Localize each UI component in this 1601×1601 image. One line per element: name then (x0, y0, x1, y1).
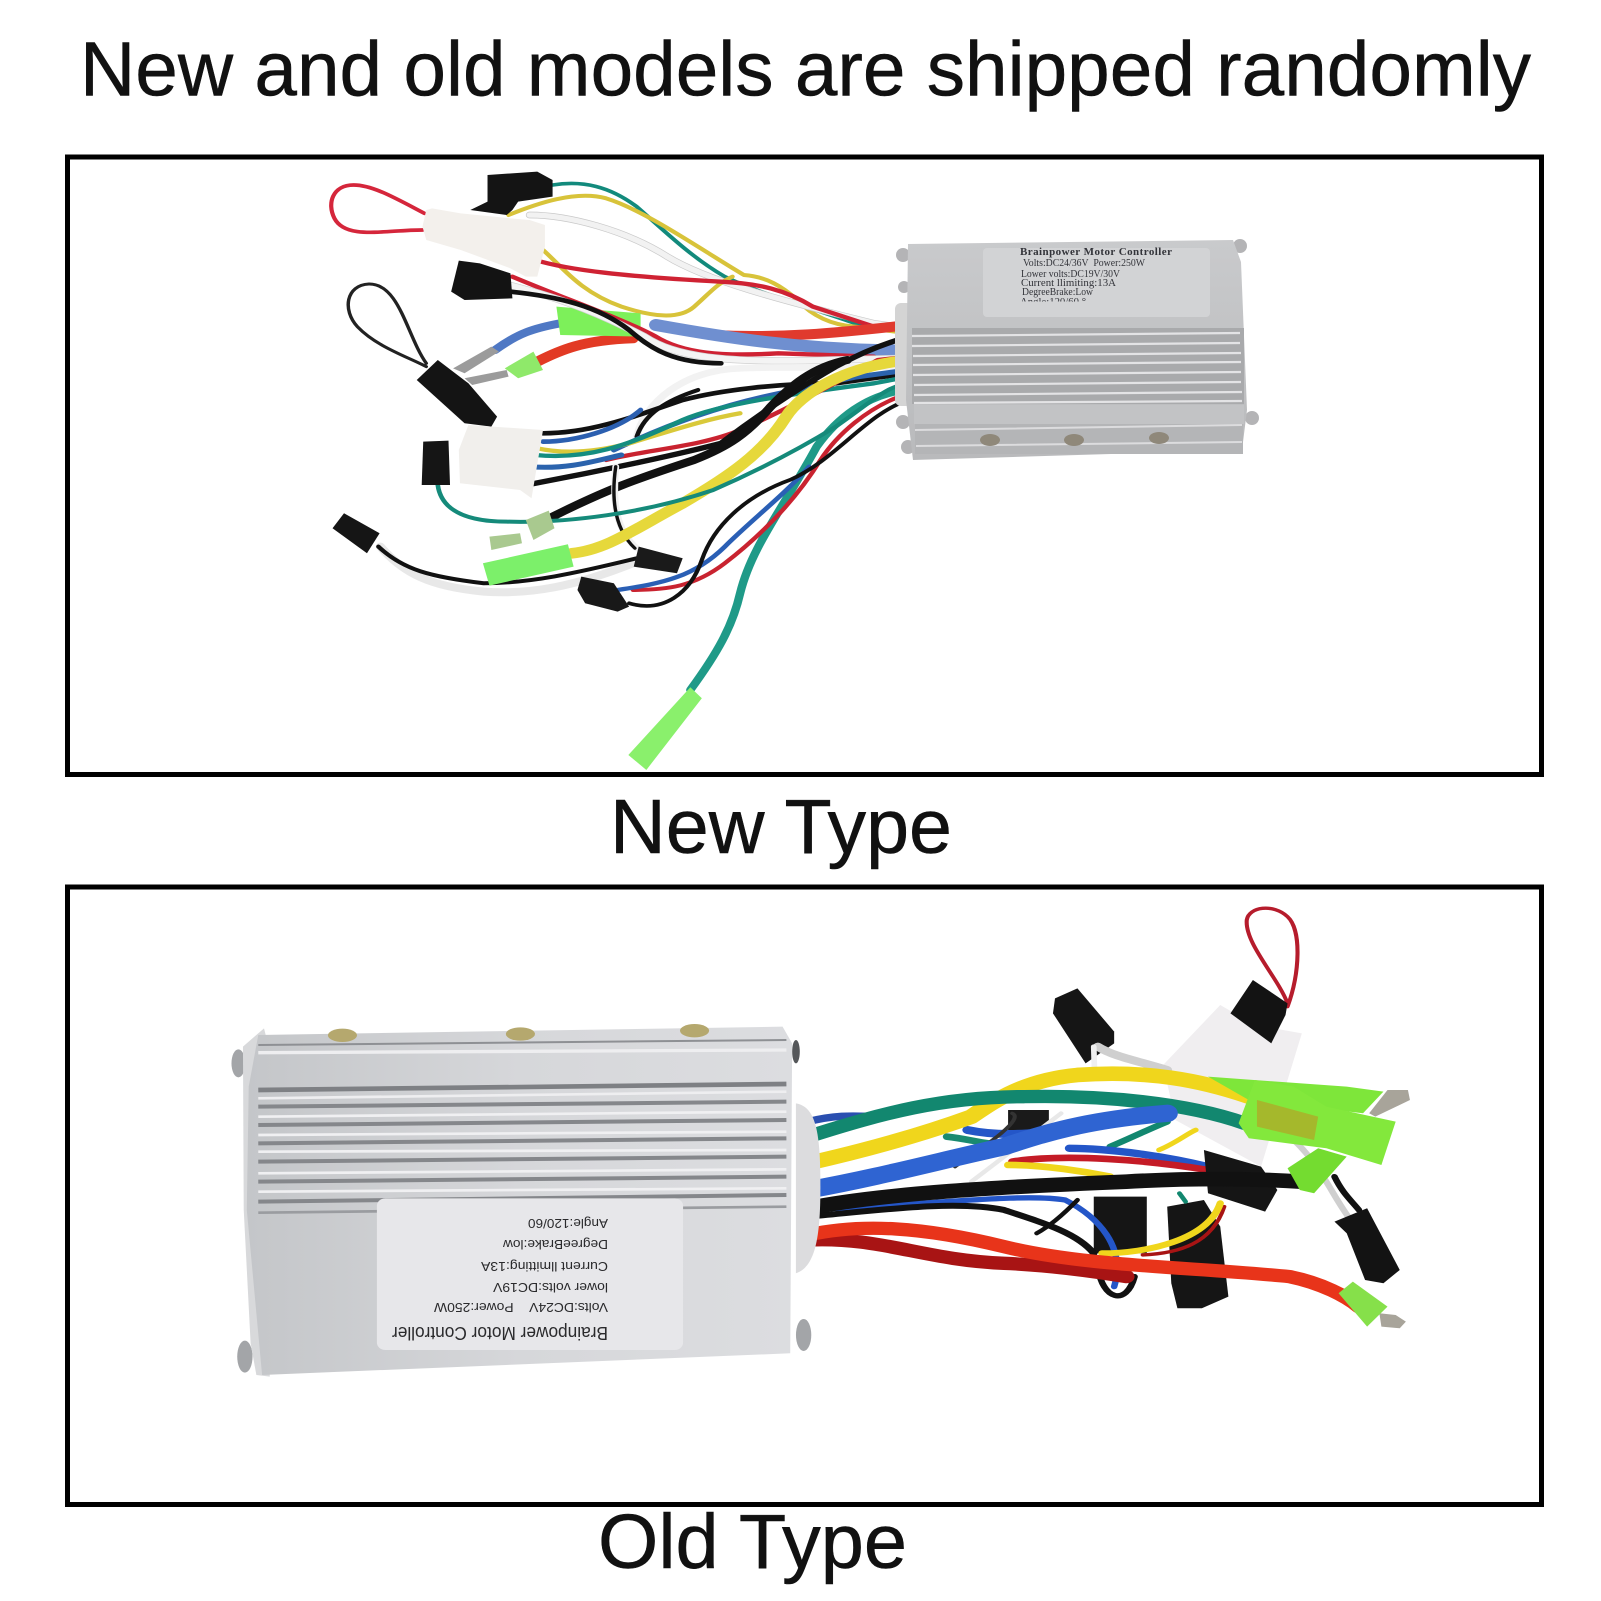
panel: old type product photo (68, 887, 1542, 1504)
bolts (231, 1040, 811, 1373)
terminal: long green sleeve (628, 687, 702, 770)
terminal: green wide sleeve (483, 544, 574, 586)
grommet (895, 303, 913, 406)
connector: black mid plug (417, 360, 497, 427)
label text: upside down: lower volts:DC19V (492, 1280, 608, 1294)
label text: Brainpower Motor Controller (1020, 246, 1172, 258)
connector: black small lower left (333, 513, 380, 553)
label text: upside down: Current llmitting:13A (480, 1259, 608, 1273)
terminal: bullet with sleeve (489, 511, 554, 550)
housing (906, 240, 1247, 460)
label text: upside down: Angle:120/60 (528, 1216, 608, 1230)
connector: black lower ribbed (577, 577, 629, 612)
black plug right (1334, 1208, 1400, 1283)
label text: DegreeBrake:Low (1022, 286, 1093, 298)
label text: Volts:DC24/36V Power:250W (1023, 257, 1146, 269)
connector: black left plug (422, 441, 450, 485)
label area (983, 248, 1210, 317)
white plug (1163, 1005, 1302, 1167)
terminal: green sleeve upper (556, 307, 641, 337)
label text: Angle:120/60 ° (1020, 296, 1086, 308)
connector: top black (470, 172, 553, 215)
red loop (1247, 908, 1298, 1007)
caption: new type: New Type (610, 784, 952, 870)
grommet (796, 1103, 820, 1273)
wire harness: old type (796, 908, 1410, 1328)
corner nuts (896, 239, 1259, 454)
label text: Current llimiting:13A (1021, 277, 1116, 289)
label text: Lower volts:DC19V/30V (1021, 268, 1120, 280)
wire harness: new type (331, 183, 908, 690)
label text: upside down: Brainpower Motor Controller (392, 1323, 608, 1343)
caption: old type: Old Type (598, 1499, 907, 1585)
label text: upside down: DegreeBrake:low (502, 1237, 608, 1251)
black plug top (1230, 980, 1288, 1043)
connector: white lower plug (459, 425, 543, 498)
label panel (377, 1198, 683, 1350)
housing rim (243, 1028, 270, 1377)
screws (980, 432, 1169, 446)
black plug centre (1204, 1150, 1277, 1212)
terminal: silver pins (453, 347, 509, 385)
label text: upside down (392, 1216, 608, 1343)
bullet terminal (1379, 1313, 1406, 1328)
top screws (328, 1024, 709, 1042)
terminal: small green sleeve (505, 352, 543, 378)
controller box: new type (895, 239, 1259, 460)
connector: black lower mid (634, 547, 683, 573)
label text (1020, 248, 1172, 302)
connector: black double plug (451, 261, 512, 300)
black plugs lower (1094, 1197, 1147, 1253)
connector: white loop plug (422, 208, 545, 277)
cooling ribs (912, 328, 1244, 454)
controller box: old type (231, 1024, 811, 1377)
green terminals (1208, 1077, 1383, 1113)
cooling ribs (258, 1040, 786, 1213)
black plug left (1053, 988, 1114, 1063)
title: New and old models are shipped randomly (80, 26, 1531, 112)
panel: new type product photo (68, 157, 1542, 774)
connectors and terminals: new type (333, 172, 702, 770)
housing (247, 1027, 792, 1375)
label text: upside down: Volts:DC24V Power:250W (434, 1300, 608, 1314)
